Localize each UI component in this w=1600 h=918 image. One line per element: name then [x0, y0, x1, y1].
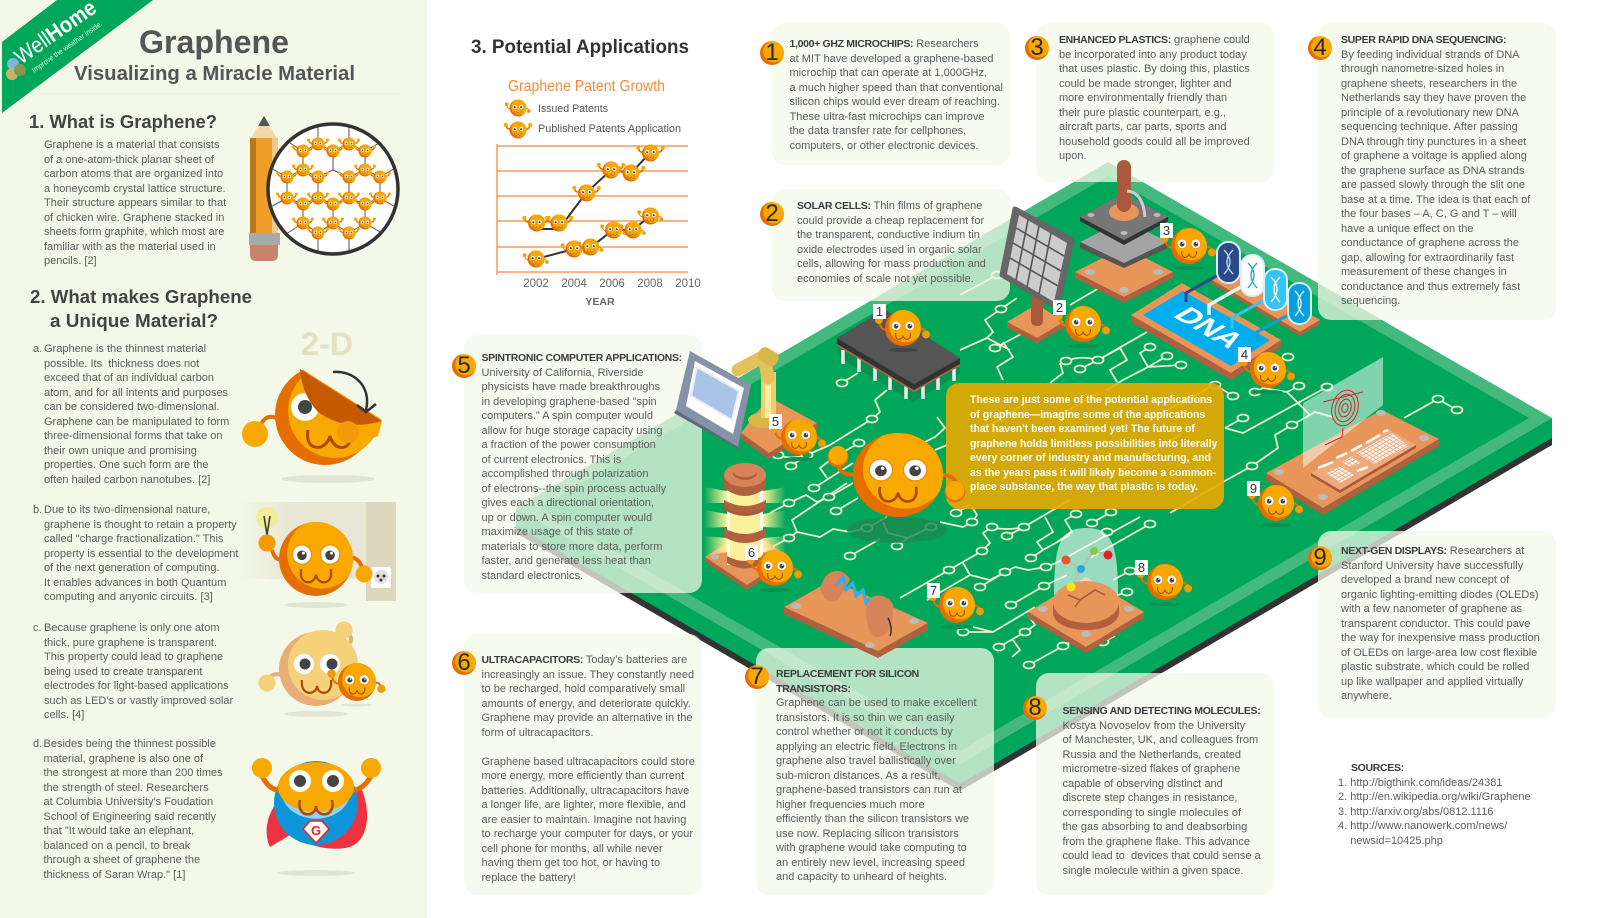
axis labels: YEAR — [585, 296, 615, 308]
published patents points — [522, 144, 665, 232]
text: item b — [33, 504, 238, 603]
text: displays: transparent conductor. This could pave — [1341, 618, 1530, 630]
text: transistors: efficiently than the silicon transistors we — [776, 813, 969, 825]
text: ultracapacitors: having them get too hot, or having to — [482, 857, 660, 869]
axis labels: 2008 — [637, 278, 663, 290]
text: ultracapacitors — [482, 654, 695, 884]
mascot: folded 2-D — [242, 364, 382, 483]
device: solar panel — [1002, 209, 1072, 343]
callout: center message: as the years pass it will likely become a common- — [970, 466, 1216, 478]
mascot 2: 2 — [1056, 300, 1063, 315]
text: item c: such as LED's or vastly improved solar — [44, 694, 233, 706]
series lines — [536, 153, 650, 259]
text: spintronics: SPINTRONIC COMPUTER APPLICATIONS: — [482, 352, 682, 364]
text: item b: graphene is thought to retain a property — [44, 518, 237, 530]
device: ultracapacitor — [704, 463, 790, 590]
chart title: Graphene Patent Growth — [508, 78, 665, 95]
axis labels: 2010 — [675, 278, 701, 290]
text: transistors: an entirely new level, increasing speed — [776, 856, 965, 868]
sources: 1. http://bigthink.com/ideas/24381 — [1338, 776, 1502, 788]
subtitle: Visualizing a Miracle Material — [74, 62, 355, 85]
axis labels: 2002 — [523, 278, 549, 290]
text: item c: c. — [33, 622, 42, 634]
text: DNA sequencing: measurement of these changes in — [1341, 266, 1507, 278]
text: item d: Besides being the thinnest possible — [44, 738, 216, 750]
text: what is graphene: Their structure appears similar to that — [44, 197, 226, 209]
text: transistors: REPLACEMENT FOR SILICON — [776, 668, 919, 680]
text: transistors: applying an electric field. Electrons in — [776, 740, 957, 752]
text: solar cells: could provide a cheap replacement for — [797, 214, 984, 226]
device: keyboard with transparent display — [1266, 357, 1439, 515]
mascot 6: 6 — [748, 545, 755, 560]
badge 7 — [745, 665, 769, 689]
badge 2 — [760, 202, 784, 226]
panel: microchips — [772, 23, 1010, 165]
icon: magnified honeycomb lattice — [265, 124, 400, 255]
badge 5: 5 — [457, 352, 471, 379]
text: item d: that "It would take an elephant, — [44, 825, 194, 837]
axis labels: 2004 — [561, 278, 587, 290]
mascot 6 — [745, 545, 802, 592]
mascot 8: 8 — [1138, 560, 1145, 575]
text: item d: the strength of steel. Researchers — [44, 782, 209, 794]
mascot 3: 3 — [1163, 223, 1170, 238]
text: transistors: and capacity to unheard of heights. — [776, 871, 947, 883]
badge 6: 6 — [457, 649, 471, 676]
text: sensing: corresponding to single molecules of — [1062, 806, 1241, 818]
text: spintronics: standard electronics. — [482, 570, 583, 582]
panel: spintronics — [464, 335, 702, 593]
text: ultracapacitors: increasingly an issue. They constantly need — [482, 668, 694, 680]
text: ultracapacitors: Graphene based ultracapacitors could store — [482, 756, 695, 768]
text: spintronics: gives each a directional orientation, — [482, 497, 654, 509]
text: microchips — [790, 38, 1003, 152]
text: sensing: Kostya Novoselov from the University — [1062, 720, 1245, 732]
text: DNA sequencing: principle of a revolutionary new DNA — [1341, 106, 1519, 118]
text: ultracapacitors: cell phone for months, all while never — [482, 842, 662, 854]
badge 4 — [1308, 36, 1332, 60]
text: DNA sequencing: By feeding individual strands of DNA — [1341, 48, 1520, 60]
sources: 4. http://www.nanowerk.com/news/ — [1338, 820, 1507, 832]
badge 6 — [452, 651, 476, 675]
text: DNA sequencing: the graphene surface as DNA strands — [1341, 164, 1524, 176]
text: DNA sequencing: sequencing. — [1341, 295, 1400, 307]
text: DNA sequencing — [1341, 34, 1530, 307]
badge 9: 9 — [1313, 544, 1327, 571]
text: transistors: with graphene would take computing to — [776, 842, 967, 854]
text: ultracapacitors: are easier to maintain. Imagine not having — [482, 814, 686, 826]
chart: patent growth — [497, 78, 701, 308]
text: DNA sequencing: of graphene a voltage is applied along — [1341, 150, 1527, 162]
axis labels: 2006 — [599, 278, 625, 290]
text: plastics: that uses plastic. By doing this, plastics — [1059, 63, 1250, 75]
mascot 1 — [873, 304, 930, 352]
text: DNA sequencing: DNA through tiny punctures in a sheet — [1341, 136, 1526, 148]
text: displays: the way for inexpensive mass production — [1341, 632, 1540, 644]
text: displays: of OLEDs on large-area low cost flexible — [1341, 646, 1537, 658]
mascot 4 — [1238, 347, 1295, 394]
mascot 7 — [927, 583, 984, 629]
text: microchips: microchip that can operate at 1,000GHz, — [790, 67, 987, 79]
text: microchips: at MIT have developed a graphene-based — [790, 52, 994, 64]
text: item b: b. — [33, 504, 42, 516]
panel: plastics — [1036, 23, 1274, 182]
text: what is graphene: a honeycomb crystal lattice structure. — [44, 182, 226, 194]
text: ultracapacitors: more energy, more efficiently than current — [482, 770, 684, 782]
callout: center message: These are just some of the potential applications — [970, 394, 1212, 406]
text: ultracapacitors: a longer life, are lighter, more flexible, and — [482, 799, 686, 811]
text: plastics: aircraft parts, car parts, sports and — [1059, 121, 1227, 133]
text: item d: material, graphene is also one of — [44, 752, 203, 764]
device: DNA sequencer — [1131, 242, 1320, 380]
trace pads — [772, 272, 1462, 668]
text: item d: thickness of Saran Wrap." [1] — [44, 868, 185, 880]
text: plastics: more environmentally friendly than — [1059, 92, 1227, 104]
text: DNA sequencing: SUPER RAPID DNA SEQUENCING: — [1341, 34, 1506, 46]
text: ultracapacitors: to be recharged, hold comparatively small — [482, 683, 685, 695]
text: item a: often hailed carbon nanotubes. [2] — [44, 474, 210, 486]
text: microchips: silicon chips would ever dream of reaching. — [790, 96, 1000, 108]
text: item d: d. — [33, 738, 42, 750]
mascot 2 — [1053, 300, 1110, 348]
text: ultracapacitors: ULTRACAPACITORS: Today’s batteries are — [482, 654, 687, 666]
text: sensing: micrometre-sized flakes of graphene — [1062, 763, 1240, 775]
text: item c: cells. [4] — [44, 709, 84, 721]
text: spintronics — [482, 352, 682, 582]
text: solar cells — [797, 200, 986, 284]
text: displays: organic lighting-emitting diodes (OLEDs) — [1341, 588, 1538, 600]
text: microchips: the data transfer rate for cellphones, — [790, 125, 966, 137]
badge 9 — [1308, 546, 1332, 570]
text: transistors: graphene-based transistors can run at — [776, 784, 962, 796]
icon: pencil — [249, 116, 280, 261]
mascot 8 — [1135, 560, 1192, 606]
device: molecule sensor — [1028, 528, 1144, 653]
badge 8: 8 — [1028, 694, 1042, 721]
text: spintronics: allow for huge storage capacity using — [482, 424, 662, 436]
text: DNA sequencing: graphene sheets, researchers in the — [1341, 78, 1517, 90]
ribbon logo — [2, 0, 153, 113]
text: item d: at Columbia University's Foudation — [44, 796, 213, 808]
text: sensing: Russia and the Netherlands, created — [1062, 748, 1241, 760]
text: transistors: Graphene can be used to make excellent — [776, 697, 977, 709]
text: sensing: SENSING AND DETECTING MOLECULES: — [1062, 705, 1260, 717]
text: item c: This property could lead to graphene — [44, 651, 223, 663]
text: ultracapacitors: form of ultracapacitors. — [482, 726, 593, 738]
text: DNA sequencing: through nanometre-sized holes in — [1341, 63, 1504, 75]
text: solar cells: the transparent, conductive indium tin — [797, 229, 980, 241]
panel: silicon transistors — [756, 648, 994, 895]
text: spintronics: computers." A spin computer would — [482, 410, 653, 422]
axes and gridlines — [497, 144, 688, 275]
text: what is graphene: pencils. [2] — [44, 255, 97, 267]
text: solar cells: SOLAR CELLS: Thin films of graphene — [797, 200, 982, 212]
mascot 5: 5 — [772, 414, 779, 429]
text: what is graphene — [44, 139, 226, 267]
badge 8 — [1023, 696, 1047, 720]
mascot 7: 7 — [930, 583, 937, 598]
sources: SOURCES: — [1351, 762, 1404, 774]
text: item c — [33, 622, 233, 721]
text: transistors: transistors. It is so thin we can easily — [776, 712, 955, 724]
callout: center message: graphene holds limitless possibilities into literally — [970, 438, 1217, 450]
callout: center message: every corner of industry and manufacturing, and — [970, 452, 1211, 464]
device: DNA sequencer: DNA — [1166, 303, 1251, 353]
text: item b: computing and anyonic circuits. [3] — [44, 591, 213, 603]
text: what is graphene: Graphene is a material that consists — [44, 139, 219, 151]
panel: left sidebar — [0, 0, 427, 918]
text: ultracapacitors: to recharge your computer for days, or your — [482, 828, 693, 840]
text: sensing: could lead to devices that could sense a — [1062, 850, 1261, 862]
text: transistors: TRANSISTORS: — [776, 682, 851, 694]
mascot: charge fractionalization with bulb and socket — [240, 502, 396, 608]
panel: solar cells — [772, 189, 1010, 301]
text: DNA sequencing: Netherlands say they have proven the — [1341, 92, 1526, 104]
board body — [516, 162, 1552, 791]
text: DNA sequencing: are passed slowly through the slit one — [1341, 179, 1525, 191]
callout: center message: place substance, the way that plastic is today. — [970, 481, 1198, 493]
text: ultracapacitors: batteries. Additionally, ultracapacitors have — [482, 784, 689, 796]
text: ultracapacitors: Graphene may provide an alternative in the — [482, 712, 692, 724]
heading 2: 2. What makes Graphene — [30, 286, 252, 307]
badge 1: 1 — [765, 39, 779, 66]
text: transistors: sub-micron distances. As a result, — [776, 770, 940, 782]
mascot: large central — [828, 430, 966, 543]
text: spintronics: of current electronics. This is — [482, 454, 621, 466]
text: displays: plastic substrate, which could be rolled — [1341, 661, 1529, 673]
text: item b: property is essential to the development — [44, 548, 238, 560]
text: plastics: could be made stronger, lighter and — [1059, 78, 1231, 90]
badge 7: 7 — [750, 663, 764, 690]
text: DNA sequencing: conductance of graphene across the — [1341, 237, 1519, 249]
circuit traces — [770, 275, 1457, 665]
text: sensing — [1062, 705, 1261, 876]
panel: next-gen displays — [1318, 531, 1556, 718]
text: displays: developed a brand new concept of — [1341, 574, 1509, 586]
text: DNA sequencing: conductance and thus extremely fast — [1341, 280, 1520, 292]
legend: Issued Patents — [538, 103, 608, 115]
mascot: super graphene: G — [311, 823, 321, 838]
text: DNA sequencing: gap, allowing for extraordinarily fast — [1341, 252, 1514, 264]
text: transistors: use now. Replacing silicon transistors — [776, 828, 959, 840]
ribbon logo: Improve the weather inside. — [30, 19, 104, 75]
mascot 4: 4 — [1241, 347, 1248, 362]
badge 5 — [452, 354, 476, 378]
text: displays: NEXT-GEN DISPLAYS: Researchers at — [1341, 545, 1524, 557]
text: displays: Stanford University have successfully — [1341, 560, 1523, 572]
text: spintronics: University of California, Riverside — [482, 366, 644, 378]
mascot 9 — [1247, 481, 1303, 527]
heading 1: 1. What is Graphene? — [29, 111, 217, 132]
text: item a: Graphene can be manipulated to form — [44, 416, 229, 428]
callout: center message: of graphene—imagine some of the applications — [970, 408, 1205, 420]
text: item a: their own unique and promising — [44, 444, 197, 456]
sources — [1338, 762, 1531, 846]
legend: Published Patents Application — [538, 123, 681, 135]
legend — [504, 99, 681, 138]
sources: newsid=10425.php — [1350, 834, 1443, 846]
text: item c: electrodes for light-based applications — [44, 680, 229, 692]
text: displays: with a few nanometer of graphene as — [1341, 603, 1522, 615]
text: item d: the strongest at more than 200 times — [44, 767, 223, 779]
text: item b: It enables advances in both Quantum — [44, 576, 226, 588]
text: item a: can be considered two-dimensional. — [44, 401, 220, 413]
text: solar cells: oxide electrodes used in organic solar — [797, 244, 982, 256]
text: item d: balanced on a pencil, to break — [44, 840, 190, 852]
text: microchips: a much higher speed than that conventional — [790, 82, 1003, 94]
text: item b: Due to its two-dimensional nature, — [44, 504, 210, 516]
text: ultracapacitors: amounts of energy, and deteriorate quickly. — [482, 698, 691, 710]
mascot 5 — [769, 414, 826, 461]
text: plastics: be incorporated into any product today — [1059, 48, 1247, 60]
text: spintronics: accomplished through polarization — [482, 468, 648, 480]
text: item c: being used to create transparent — [44, 666, 202, 678]
text: microchips: These ultra-fast microchips can improve — [790, 110, 985, 122]
axis labels — [523, 278, 701, 308]
text: microchips: 1,000+ GHZ MICROCHIPS: Researchers — [790, 38, 979, 50]
issued patents points — [523, 207, 663, 268]
text: spintronics: in developing graphene-based "spin — [482, 396, 657, 408]
text: sensing: of Manchester, UK, and colleagues from — [1062, 734, 1258, 746]
text: spintronics: up or down. A spin computer would — [482, 512, 652, 524]
text: sensing: the gas absorbing to and deabsorbing — [1062, 821, 1247, 833]
title: Graphene — [139, 24, 289, 60]
mascot 1: 1 — [876, 304, 883, 319]
text: microchips: computers, or other electronic devices. — [790, 140, 978, 152]
text: displays: anywhere. — [1341, 690, 1392, 702]
text: transistors: control whether or not it conducts by — [776, 726, 953, 738]
label: 2-D: 2-D — [301, 326, 353, 362]
text: what is graphene: sheets form graphite, which most are — [44, 226, 224, 238]
text: plastics: their pure plastic counterpart, e.g., — [1059, 106, 1226, 118]
text: spintronics: of electrons--the spin process actually — [482, 482, 666, 494]
text: item a: Graphene is the thinnest material — [44, 343, 206, 355]
mascot: transparent — [258, 622, 386, 717]
device: microchip — [837, 309, 960, 402]
text: ultracapacitors: replace the battery! — [482, 872, 576, 884]
panel: sensing molecules — [1036, 673, 1274, 895]
device: robot arm and screen — [674, 345, 817, 459]
heading: potential applications: 3. Potential Applications — [471, 37, 689, 58]
text: what is graphene: carbon atoms that are organized into — [44, 168, 223, 180]
text: item d — [33, 738, 223, 880]
mascot 3 — [1160, 223, 1216, 270]
text: item b: of the next generation of computing. — [44, 562, 220, 574]
text: item a: possible. Its thickness does not — [44, 358, 199, 370]
text: solar cells: economies of scale not yet possible. — [797, 272, 974, 284]
sources: 3. http://arxiv.org/abs/0812.1116 — [1338, 806, 1493, 818]
mascot: super graphene — [252, 758, 381, 876]
text: transistors: higher frequencies much more — [776, 798, 925, 810]
text: transistors: graphene also travel ballistically over — [776, 755, 956, 767]
text: plastics: household goods could all be improved — [1059, 136, 1250, 148]
sources: 2. http://en.wikipedia.org/wiki/Graphene — [1338, 791, 1531, 803]
text: item c: Because graphene is only one atom — [44, 622, 220, 634]
text: spintronics: faster, and generate less heat than — [482, 555, 651, 567]
text: item b: called "charge fractionalization." This — [44, 533, 223, 545]
device: plastics press — [1075, 160, 1173, 303]
text: transistors — [776, 668, 977, 883]
text: displays: up like wallpaper and applied virtually — [1341, 676, 1523, 688]
text: item a: a. — [33, 343, 42, 355]
text: item d: School of Engineering said recently — [44, 810, 216, 822]
badge 4: 4 — [1313, 34, 1327, 61]
text: DNA sequencing: base at a time. The idea is that each of — [1341, 194, 1530, 206]
text: item d: through a sheet of graphene the — [44, 854, 200, 866]
text: sensing: discrete step changes in resistance, — [1062, 792, 1237, 804]
text: sensing: capable of observing distinct and — [1062, 778, 1223, 790]
text: spintronics: materials to store more data, perform — [482, 540, 662, 552]
badge 2: 2 — [765, 200, 779, 226]
text: spintronics: a fraction of the power consumption — [482, 439, 656, 451]
text: item a — [33, 343, 229, 486]
callout: center message: that haven't been examined yet! The future of — [970, 423, 1195, 435]
text: plastics: ENHANCED PLASTICS: graphene could — [1059, 34, 1250, 46]
panel: ultracapacitors — [464, 634, 702, 895]
text: sensing: from the graphene flake. This advance — [1062, 836, 1250, 848]
sidebar graphics and headings — [2, 0, 400, 876]
text: item a: properties. One such form are the — [44, 459, 208, 471]
badge 3 — [1025, 36, 1049, 60]
text: item a: atom, and for all intents and purposes — [44, 386, 228, 398]
text: DNA sequencing: sequencing technique. After passing — [1341, 121, 1518, 133]
text: displays — [1341, 545, 1540, 702]
panel: DNA sequencing — [1318, 23, 1556, 320]
text: spintronics: physicists have made breakthroughs — [482, 381, 660, 393]
text: DNA sequencing: the four bases – A, C, G and T – will — [1341, 208, 1517, 220]
lattice atoms — [276, 137, 391, 240]
heading 2: a Unique Material? — [50, 310, 218, 331]
text: item a: exceed that of an individual carbon — [44, 372, 214, 384]
badge 3: 3 — [1030, 34, 1044, 61]
text: what is graphene: of chicken wire. Graphene stacked in — [44, 212, 224, 224]
device: resistor plate — [784, 571, 928, 658]
text: spintronics: maximize usage of this state of — [482, 526, 633, 538]
text: solar cells: cells, allowing for mass production and — [797, 258, 986, 270]
mascot 9: 9 — [1250, 481, 1257, 496]
callout: center message — [946, 383, 1224, 509]
badge 1 — [760, 41, 784, 65]
text: item c: thick, pure graphene is transparent. — [44, 636, 217, 648]
text: DNA sequencing: have a unique effect on the — [1341, 222, 1474, 234]
text: plastics — [1059, 34, 1250, 162]
text: plastics: upon. — [1059, 150, 1087, 162]
text: item a: three-dimensional forms that take on — [44, 430, 223, 442]
text: sensing: single molecule within a given space. — [1062, 864, 1244, 876]
text: what is graphene: familiar with as the material used in — [44, 240, 216, 252]
text: what is graphene: of a one-atom-thick planar sheet of — [44, 154, 214, 166]
